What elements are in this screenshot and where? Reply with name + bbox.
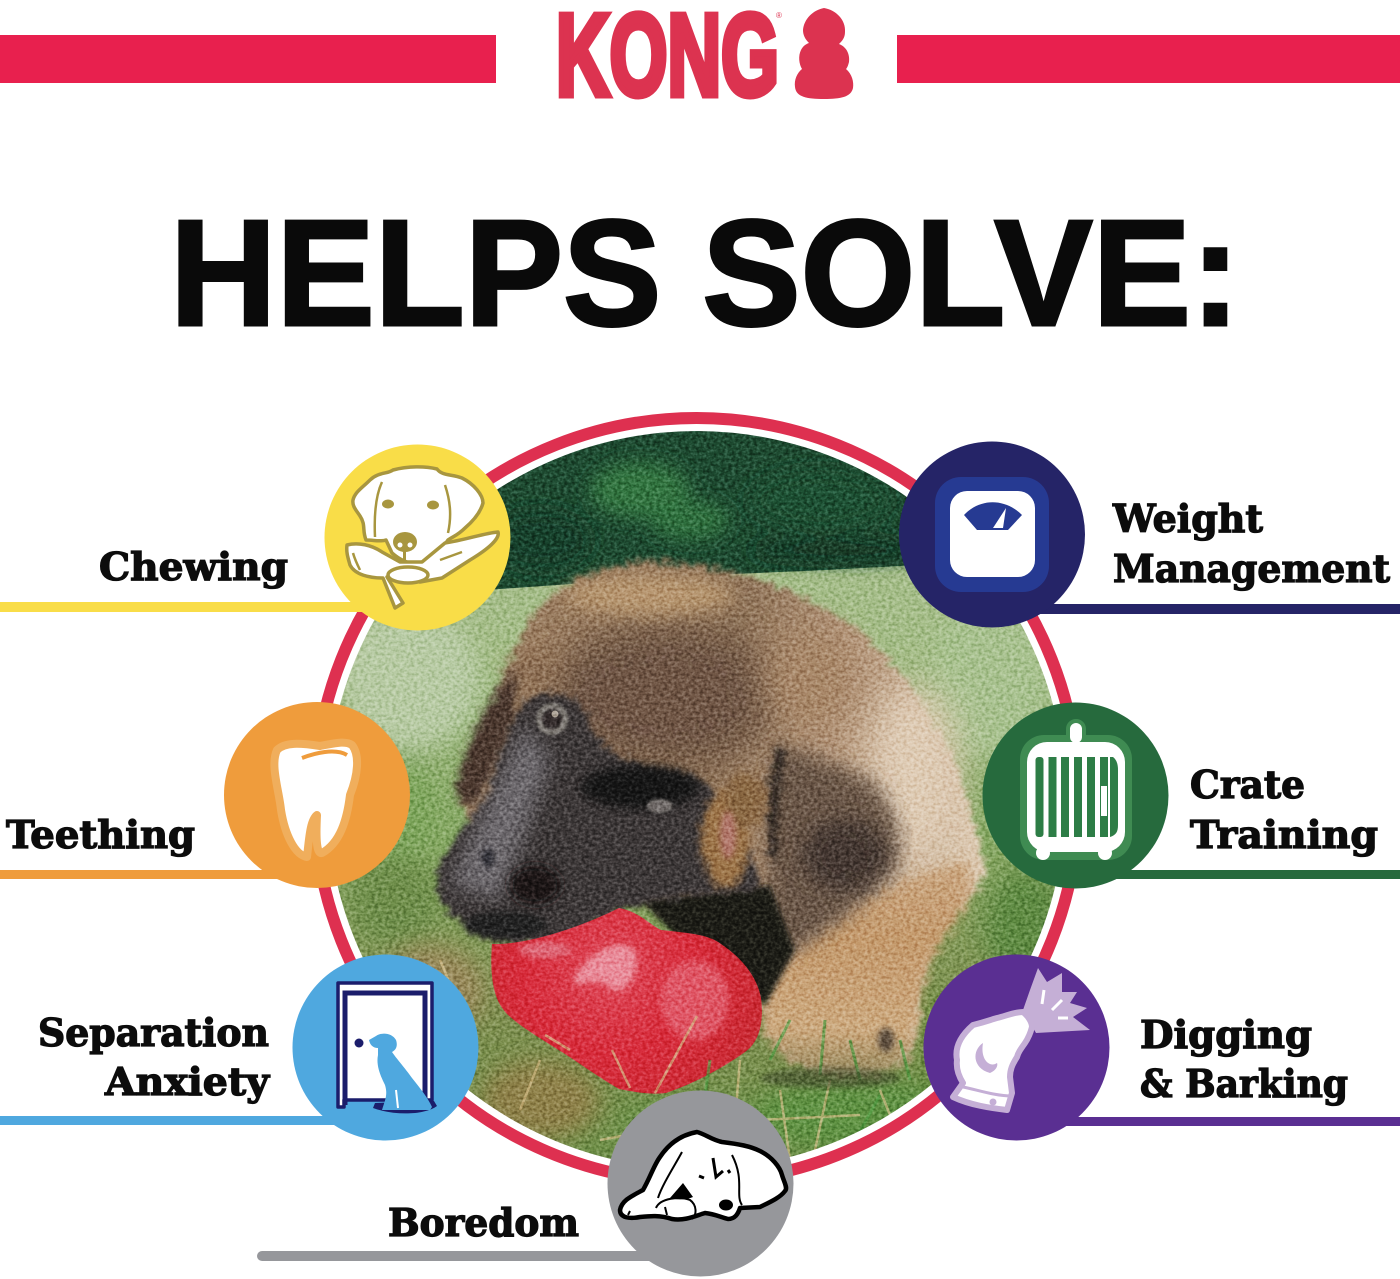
KONG logo bbox=[556, 0, 853, 120]
ear dark centre bbox=[803, 820, 887, 890]
crate outline glow bbox=[1020, 735, 1132, 860]
label line: crate: Crate bbox=[1190, 762, 1305, 807]
ear and paw lines bbox=[628, 1152, 742, 1219]
photo grain bbox=[320, 420, 1080, 1180]
tooth shape bbox=[274, 743, 357, 857]
header bar: right bbox=[897, 35, 1400, 83]
dog outline bbox=[620, 1132, 786, 1219]
label line: and barking: & Barking bbox=[1140, 1061, 1348, 1106]
icon: dog holding shoe bbox=[347, 467, 498, 608]
label line: digging: Digging bbox=[1140, 1012, 1312, 1057]
ear dark inner edge bbox=[771, 750, 782, 860]
crate handle bbox=[1068, 721, 1084, 745]
tooth ridge bbox=[302, 752, 347, 758]
nose bbox=[482, 849, 494, 867]
icon: sleeping dog bbox=[620, 1132, 786, 1219]
badge: separation anxiety bbox=[292, 954, 478, 1140]
dog face bbox=[437, 693, 765, 943]
dog collar bbox=[963, 1087, 1012, 1096]
lighter crown top bbox=[565, 575, 735, 615]
label: separation anxiety bbox=[38, 1010, 270, 1104]
photo grass background bbox=[338, 566, 1056, 1159]
icon: dog waiting at door bbox=[338, 983, 437, 1113]
glint bbox=[552, 710, 558, 718]
left eye bbox=[536, 703, 568, 735]
red ring around photo bbox=[314, 418, 1078, 1182]
dog silhouette bbox=[369, 1034, 432, 1110]
purple circle bbox=[924, 954, 1110, 1140]
logo toy silhouette bbox=[795, 8, 853, 99]
tan above eye bbox=[509, 654, 561, 686]
crate door latch bbox=[1101, 786, 1107, 816]
registered mark: ® bbox=[776, 11, 782, 20]
green blades over paw bbox=[704, 1020, 912, 1131]
title: HELPS SOLVE: bbox=[170, 188, 1240, 357]
shoe sole bbox=[388, 567, 428, 583]
icon: bathroom scale bbox=[935, 477, 1049, 592]
scale frame bbox=[935, 477, 1049, 592]
upper cheek bbox=[725, 772, 765, 828]
label line: management: Management bbox=[1113, 546, 1390, 591]
rule: digging and barking bbox=[1060, 1117, 1400, 1126]
paw toe shadow bbox=[878, 1028, 894, 1052]
scale plate bbox=[950, 491, 1035, 577]
cheek tan bbox=[701, 792, 749, 888]
crate feet bbox=[1036, 846, 1050, 860]
toy body bbox=[491, 908, 762, 1094]
shoe bbox=[347, 532, 498, 608]
dog head bbox=[353, 467, 483, 563]
bark burst bbox=[1023, 968, 1090, 1033]
dog ear bbox=[975, 1043, 997, 1073]
badge: chewing bbox=[324, 444, 510, 630]
dark lip bbox=[509, 865, 561, 905]
icon details: eyes and nose bbox=[382, 500, 439, 560]
right eye bbox=[580, 765, 700, 813]
label: chewing: Chewing bbox=[99, 544, 288, 589]
neck tan bbox=[765, 630, 855, 730]
grey circle bbox=[608, 1090, 794, 1276]
door knob bbox=[354, 1038, 364, 1048]
burst streaks bbox=[1042, 990, 1068, 1018]
dog eyes and brow bbox=[699, 1158, 730, 1178]
toy highlights bbox=[519, 942, 729, 1040]
lower jaw bbox=[463, 911, 547, 939]
badge: crate training bbox=[982, 702, 1168, 888]
icon: barking dog bbox=[953, 968, 1090, 1110]
photo trees bbox=[494, 431, 907, 590]
dark socket bbox=[580, 765, 700, 809]
icon: travel crate bbox=[1020, 721, 1132, 860]
dog head bbox=[953, 1012, 1032, 1110]
cheek pink bbox=[720, 811, 736, 859]
cream back bbox=[870, 685, 960, 855]
left ear bbox=[455, 665, 520, 803]
door frame bbox=[338, 983, 432, 1107]
rule: separation anxiety bbox=[0, 1116, 340, 1125]
muzzle grey bbox=[450, 725, 550, 900]
door lintel and edge bbox=[345, 993, 425, 1105]
scale needle bbox=[993, 508, 1006, 528]
label: weight management bbox=[1112, 496, 1390, 591]
dog nose bbox=[719, 1200, 733, 1210]
pupil bbox=[542, 709, 562, 729]
red Kong toy bbox=[491, 908, 762, 1094]
eye glint bbox=[647, 799, 673, 813]
orange circle bbox=[224, 702, 410, 888]
photo: puppy chewing red toy bbox=[320, 420, 1080, 1180]
rule: crate training bbox=[1110, 870, 1400, 879]
navy circle bbox=[899, 442, 1085, 628]
badge: teething bbox=[224, 702, 410, 888]
label line: weight: Weight bbox=[1112, 496, 1263, 541]
dog eye patch bbox=[670, 1183, 693, 1199]
label: digging and barking bbox=[1140, 1012, 1348, 1106]
badge: boredom bbox=[608, 1090, 794, 1276]
blue circle bbox=[292, 954, 478, 1140]
label: crate training bbox=[1190, 762, 1378, 857]
label: teething: Teething bbox=[6, 812, 195, 857]
label: boredom: Boredom bbox=[388, 1200, 579, 1245]
badge: digging and barking bbox=[924, 954, 1110, 1140]
grass blades bbox=[439, 960, 891, 1157]
collar tag bbox=[990, 1098, 996, 1106]
label line: separation: Separation bbox=[38, 1010, 269, 1055]
yellow circle bbox=[324, 444, 510, 630]
eye rim bbox=[536, 703, 568, 735]
crate body bbox=[1027, 742, 1125, 852]
shadow behind toy bbox=[640, 885, 795, 1005]
label line: training: Training bbox=[1190, 812, 1378, 857]
header bar: left bbox=[0, 35, 496, 83]
shadow under paw bbox=[760, 1068, 900, 1088]
dog paws shadow bbox=[373, 1101, 437, 1113]
ear and sole lines bbox=[353, 482, 462, 570]
photo grass tone patches bbox=[340, 600, 1065, 1153]
icon: tooth bbox=[274, 743, 357, 857]
brown crown bbox=[550, 625, 780, 765]
green circle bbox=[982, 702, 1168, 888]
crate bars bbox=[1036, 757, 1118, 837]
right ear bbox=[767, 744, 899, 951]
rule: teething bbox=[0, 870, 285, 879]
badge: weight management bbox=[899, 442, 1085, 628]
label line: anxiety: Anxiety bbox=[104, 1059, 270, 1104]
photo tree highlights bbox=[490, 462, 930, 570]
rule: boredom bbox=[257, 1251, 657, 1261]
foreleg bbox=[763, 860, 971, 1076]
rule: chewing bbox=[0, 602, 365, 612]
dog leg gap bbox=[396, 1090, 398, 1108]
rule: weight management bbox=[1040, 604, 1400, 614]
dog body and head fur bbox=[455, 561, 985, 1073]
scale dial bbox=[964, 502, 1022, 530]
